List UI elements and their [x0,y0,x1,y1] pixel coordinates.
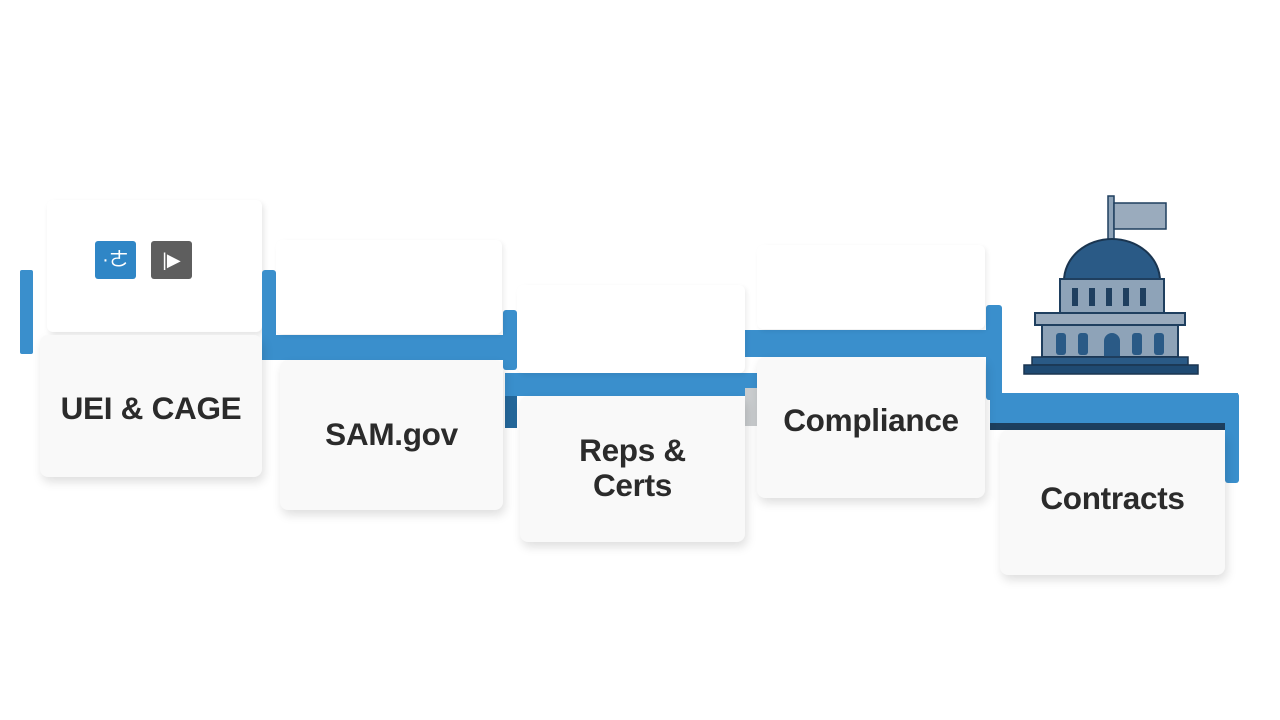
card: Contracts: Contracts [1040,480,1185,516]
connectors [262,270,276,360]
card: UEI & CAGE [40,335,262,477]
card: Reps & Certs: Reps & [579,432,686,468]
card: SAM.gov: SAM.gov [325,416,458,452]
icon: capitol building [1023,195,1199,375]
card: Reps & Certs [520,396,745,542]
icon: gray play [151,241,192,279]
card: Reps & Certs: Certs [593,467,672,503]
icon: gray play: |▶ [162,250,181,270]
card: Compliance: Compliance [783,402,959,438]
icon: blue badge: ·ㄜ [102,249,129,271]
card: Compliance [757,357,985,498]
card: Contracts [1000,430,1225,575]
card: UEI & CAGE: UEI & CAGE [61,390,241,426]
left blue bar [20,270,33,354]
card 1 top panel [47,200,262,332]
icon: blue badge [95,241,136,279]
top panels [276,240,502,334]
card: SAM.gov [280,360,503,510]
